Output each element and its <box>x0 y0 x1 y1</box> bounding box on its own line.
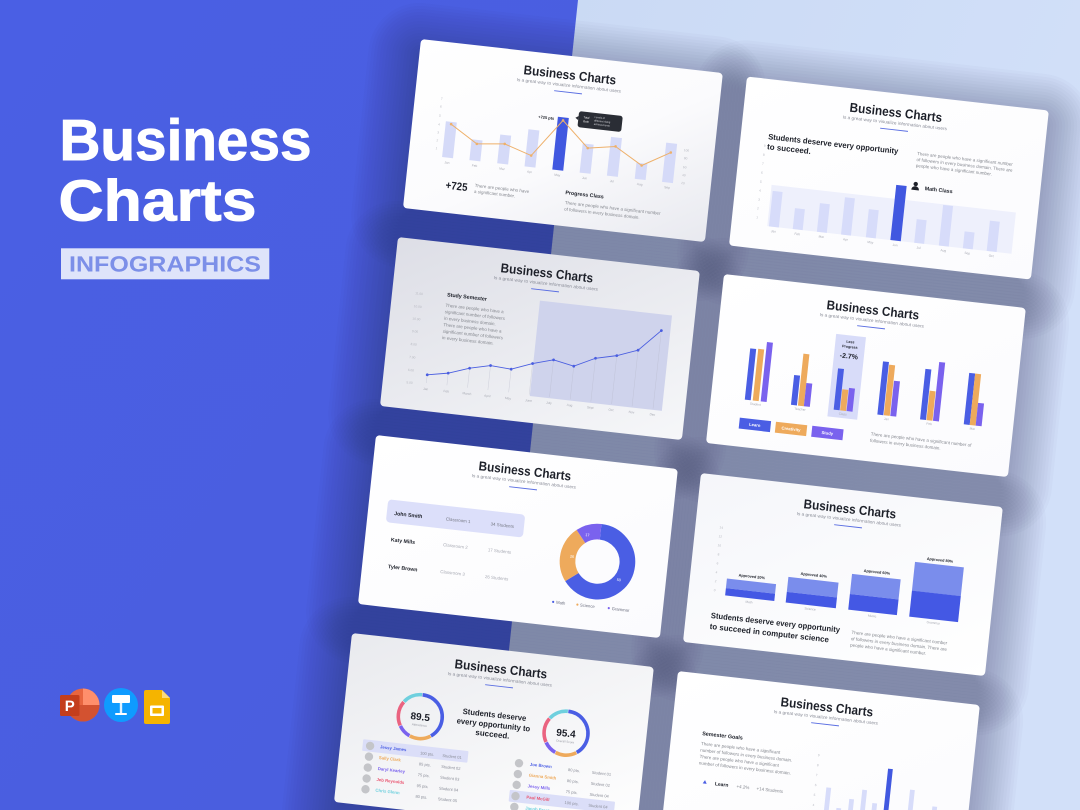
y axis labels: 8 <box>763 153 765 157</box>
table rows: John Smith <box>394 511 423 520</box>
side heading and text: There are people who have a <box>445 303 504 314</box>
panel: semester goals slide <box>660 671 980 810</box>
progress class text: of followers in every business domain. <box>564 207 640 220</box>
table: left: Daryl Kearley <box>377 766 406 774</box>
bar chart <box>769 171 1002 252</box>
y axis labels: 1 <box>756 215 758 220</box>
table: right: 75 pts. <box>565 789 578 795</box>
axis labels: 6 <box>440 105 442 109</box>
panel: score rings slide <box>334 633 654 810</box>
month labels: Sep <box>964 251 971 256</box>
highlight column: Progress <box>842 344 858 350</box>
panel: donut chart slide <box>358 435 678 638</box>
side heading and text: in every business domain. <box>442 335 494 346</box>
y axis labels: 9.00 <box>412 329 419 334</box>
slide heading: Business Charts <box>500 260 594 286</box>
table: left: Student 05 <box>438 796 458 803</box>
badge: infographics: INFOGRAPHICS <box>69 252 261 277</box>
y axis labels: 6 <box>716 561 719 565</box>
y axis labels <box>756 144 766 220</box>
slide heading: Is a great way to visualize information about users <box>819 312 925 329</box>
slide heading: Business Charts <box>780 694 874 720</box>
table: left: Jessy James <box>380 744 407 752</box>
axis labels: 40 <box>682 173 686 177</box>
icon: person <box>911 181 920 190</box>
slide heading: Is a great way to visualize information about users <box>842 114 948 131</box>
month labels: Feb <box>443 389 449 394</box>
table: left: Student 01 <box>442 753 463 760</box>
bar value labels: Approved 20% <box>738 573 766 580</box>
y axis labels: 6.00 <box>408 368 414 373</box>
bar axis labels: Science <box>804 606 816 612</box>
side heading and text: significant number of followers <box>442 329 504 340</box>
icon: PowerPoint: P <box>65 698 75 715</box>
panel: highlighted bar chart slide <box>729 76 1049 280</box>
axis labels: 3 <box>437 130 439 135</box>
table: left: 75 pts. <box>418 772 430 778</box>
month labels: Jan <box>771 229 776 234</box>
description <box>850 630 948 658</box>
table: left: 100 pts. <box>420 750 435 757</box>
slide heading <box>773 694 881 730</box>
month labels: May <box>554 173 561 177</box>
headline: Students deserve every opportunity <box>710 611 841 635</box>
y axis labels: 7.00 <box>409 355 416 360</box>
month labels: Jun <box>582 176 588 180</box>
month labels: Apr <box>527 170 533 174</box>
progress class text: Progress Class <box>565 190 604 200</box>
highlight column: Less <box>846 340 855 345</box>
slide heading: Business Charts <box>803 496 897 522</box>
month labels: Oct <box>608 408 614 412</box>
legend buttons: Learn <box>749 422 761 428</box>
highlight column <box>827 334 866 420</box>
month labels: May <box>505 396 512 401</box>
slide heading: Is a great way to visualize information about users <box>493 275 599 292</box>
tooltip <box>574 111 623 132</box>
table rows: 17 Students <box>488 547 512 555</box>
month labels: March <box>462 391 472 396</box>
table: right: Student 04 <box>589 792 610 799</box>
y axis labels: 10.00 <box>414 304 422 309</box>
y axis labels: 7 <box>816 773 818 777</box>
icon: Google Slides <box>144 690 170 724</box>
line chart <box>425 303 663 409</box>
center headline: succeed. <box>475 728 510 741</box>
bar value labels <box>738 536 954 601</box>
goals description <box>699 741 793 776</box>
goals description: number of followers in every business domain. <box>699 760 791 776</box>
grouped bars: creativity <box>753 349 981 426</box>
slide heading: Business Charts <box>826 297 920 323</box>
month labels: Jan <box>444 160 450 165</box>
bar chart <box>442 104 679 183</box>
slide heading: Is a great way to visualize information about users <box>773 709 879 726</box>
tooltip: Total <box>583 115 590 120</box>
panel: line chart slide <box>380 237 700 440</box>
month labels: Aug <box>567 403 573 408</box>
y axis labels: 4 <box>715 570 718 574</box>
table: right: Student 04 <box>588 803 609 810</box>
donut legend: Grammar <box>611 606 630 613</box>
center headline <box>455 706 532 743</box>
month labels: Feb <box>472 163 478 168</box>
table: right: 80 pts. <box>568 767 580 773</box>
slide heading: Is a great way to visualize information about users <box>516 77 622 94</box>
slide heading: Is a great way to visualize information about users <box>796 511 902 528</box>
table: right <box>508 758 618 810</box>
slide heading: Is a great way to visualize information about users <box>471 473 577 490</box>
table: right: Joe Brown <box>530 762 552 769</box>
bar axis labels: Grammar <box>926 620 941 626</box>
bar value labels: Approved 60% <box>864 569 891 576</box>
bar axis labels: Music <box>868 614 877 619</box>
y axis labels: 4 <box>812 803 815 807</box>
tooltip: achievements <box>594 123 611 128</box>
table: right: Gianna Smith <box>529 773 557 781</box>
y axis labels: 9 <box>818 753 820 757</box>
stat: +725: +725 <box>445 180 468 194</box>
slide heading <box>471 458 579 494</box>
bar axis labels <box>745 600 941 626</box>
description: people who have a significant number. <box>916 163 992 177</box>
slide heading: Business Charts <box>478 458 572 484</box>
bar value labels: Approved 80% <box>927 557 954 564</box>
month labels: April <box>484 394 491 398</box>
donut values: 26 <box>570 554 574 559</box>
slide heading <box>447 656 555 692</box>
donut chart <box>564 528 630 595</box>
month labels: Jul <box>916 246 921 250</box>
bar axis labels: Math <box>745 600 753 605</box>
y axis labels: 2 <box>714 579 717 583</box>
tooltip: Gain <box>583 119 590 124</box>
y axis labels: 11.00 <box>415 291 423 296</box>
month labels: Mar <box>818 234 825 239</box>
table: right: Paul McGill <box>526 795 550 802</box>
callout value: +725 pts <box>538 114 555 121</box>
table: left: Sally Clark <box>379 755 402 763</box>
headline <box>767 132 899 166</box>
month labels: Mar <box>499 167 506 171</box>
table: left: Jeb Reynolds <box>376 777 405 785</box>
month labels: Jun <box>892 243 898 247</box>
month labels: Sept <box>587 405 594 410</box>
y axis labels <box>405 291 423 385</box>
icon: Keynote <box>104 688 138 722</box>
group labels: Feb <box>926 422 932 426</box>
month labels: Nov <box>628 410 635 415</box>
month labels: Apr <box>843 237 849 242</box>
main title: Business <box>60 108 312 173</box>
highlight column: -2.7% <box>839 352 859 362</box>
side heading and text: Study Semester <box>447 292 487 303</box>
goals description: There are people who have a significant <box>699 754 780 768</box>
stacked bars <box>725 541 964 622</box>
donut values <box>568 532 625 582</box>
chart background band <box>767 185 1016 254</box>
ring chart 95.4 <box>542 709 590 758</box>
slide heading <box>819 297 927 333</box>
month labels: May <box>867 240 874 245</box>
table rows: Classroom 1 <box>446 516 471 524</box>
table rows: Classroom 2 <box>443 542 468 550</box>
grouped bars: study <box>761 342 988 426</box>
slide heading <box>796 496 904 532</box>
description: followers in every business domain. <box>870 438 941 451</box>
y axis labels: 2 <box>757 206 759 211</box>
month labels: Jan <box>423 387 429 391</box>
slide heading: Business Charts <box>523 62 617 88</box>
axis labels: 80 <box>684 156 688 161</box>
stat description: There are people who have <box>474 183 530 194</box>
line chart <box>447 107 674 173</box>
legend row: learn: +4.2% <box>736 784 750 790</box>
month labels <box>771 229 994 258</box>
progress class text: There are people who have a significant number <box>565 200 661 216</box>
legend buttons <box>739 418 844 440</box>
legend row: learn: +14 Students <box>756 786 784 794</box>
card shadows <box>277 0 1080 810</box>
axis labels: 2 <box>436 138 439 143</box>
group labels: Student <box>750 402 761 407</box>
axis labels: 1 <box>435 146 438 150</box>
table highlight row <box>386 499 525 538</box>
y axis labels: 9 <box>764 144 766 148</box>
tooltip: Levels of <box>594 116 605 120</box>
description <box>916 151 1014 179</box>
slide heading: Business Charts <box>849 100 943 125</box>
y axis labels: 8 <box>817 763 819 767</box>
table: left: Student 04 <box>439 785 459 793</box>
table: right: Jessy Mills <box>527 783 551 791</box>
goals description: There are people who have a significant <box>701 741 781 755</box>
goals heading: Semester Goals <box>702 731 743 742</box>
month labels: Dec <box>649 412 656 417</box>
table rows: 26 Students <box>485 574 509 582</box>
bar chart <box>820 762 941 810</box>
axis labels: 20 <box>681 181 685 185</box>
axis labels: 4 <box>438 122 440 127</box>
donut legend <box>552 599 630 613</box>
y axis labels: 3 <box>758 197 760 202</box>
group labels: Class <box>839 412 847 417</box>
panel: grouped bar chart slide <box>706 274 1026 477</box>
y axis labels: 8.00 <box>410 342 417 347</box>
y axis labels: 6 <box>761 171 763 175</box>
table: right: 80 pts. <box>567 778 579 784</box>
axis labels: 5 <box>439 113 441 118</box>
shaded chart region <box>530 301 672 411</box>
month labels: Jul <box>610 179 614 183</box>
stat description <box>474 183 530 200</box>
table: left: 95 pts. <box>416 783 429 789</box>
group labels <box>750 402 976 431</box>
axis labels: 7 <box>441 97 443 101</box>
side heading and text: significant number of followers <box>445 309 506 321</box>
y axis labels: 0 <box>714 588 716 592</box>
slide heading: Business Charts <box>454 656 548 682</box>
table: right: 100 pts. <box>564 800 579 806</box>
ring chart 95.4: Overall Score <box>556 739 575 745</box>
legend row: learn <box>702 780 784 795</box>
y axis labels: 10.00 <box>412 317 421 322</box>
slide heading <box>516 62 624 98</box>
group labels: Mar <box>969 426 976 431</box>
description: of followers in every business domain. There are <box>851 636 948 652</box>
axis labels <box>435 97 692 186</box>
table: left: 80 pts. <box>415 794 428 800</box>
table: left <box>358 739 469 804</box>
table: right: Student 01 <box>592 770 612 777</box>
y axis labels: 5 <box>760 180 762 184</box>
goals description: number of followers in every business domain. <box>700 747 792 763</box>
table: left: Student 03 <box>440 775 460 782</box>
y axis labels <box>713 525 724 592</box>
panel: approved stacked bars slide <box>683 473 1003 676</box>
headline: to succeed. <box>767 142 811 156</box>
table: left: Chris Glenn <box>375 788 400 795</box>
donut legend: Science <box>580 602 596 609</box>
ring chart 89.5 <box>396 692 444 741</box>
description: people who have a significant number. <box>850 642 926 656</box>
panel: combo bar and line chart slide <box>403 39 723 242</box>
month labels: Oct <box>988 254 994 258</box>
ring chart 95.4: 95.4 <box>556 728 577 741</box>
ring chart 89.5: Attendance <box>412 722 427 728</box>
grouped bars: learn <box>745 346 975 425</box>
y axis labels: 5.00 <box>406 380 413 385</box>
center headline: every opportunity to <box>456 716 531 734</box>
table: right: Student 02 <box>590 781 611 788</box>
headline: Students deserve every opportunity <box>768 132 899 156</box>
side heading and text: There are people who have a <box>443 322 502 334</box>
month labels: June <box>525 398 532 403</box>
month labels: Feb <box>794 232 800 236</box>
y axis labels: 14 <box>719 525 724 530</box>
table rows: Classroom 3 <box>440 569 466 577</box>
tooltip: different rising <box>594 119 611 124</box>
axis labels: 100 <box>684 148 690 153</box>
y axis labels: 7 <box>762 162 764 166</box>
legend buttons: Study <box>821 430 834 436</box>
description: of followers in every business domain. There are <box>916 157 1013 173</box>
y axis labels: 4 <box>759 189 761 193</box>
table rows: 34 Students <box>490 521 515 529</box>
y axis labels: 6 <box>814 783 817 787</box>
table: left: 85 pts. <box>419 761 431 768</box>
center headline: Students deserve <box>462 707 527 723</box>
month labels <box>423 387 656 417</box>
slide heading <box>842 99 950 136</box>
donut values: 17 <box>585 533 590 538</box>
description: There are people who have a significant number <box>851 630 948 646</box>
headline <box>709 611 841 645</box>
slide heading: Is a great way to visualize information about users <box>447 671 553 688</box>
progress class text <box>563 190 662 222</box>
ring chart 89.5: 89.5 <box>410 711 431 724</box>
y axis labels: 5 <box>813 793 816 797</box>
y axis labels: 10 <box>717 543 722 548</box>
month labels <box>444 160 670 190</box>
donut values: 50 <box>616 578 621 582</box>
donut legend: Math <box>556 600 566 606</box>
description: There are people who have a significant number <box>917 151 1014 167</box>
headline: to succeed in computer science <box>709 622 830 644</box>
table rows: Katy Mills <box>391 537 415 546</box>
background: blue diagonal left panel <box>0 0 578 810</box>
month labels: Aug <box>637 182 643 187</box>
bar value labels: Approved 40% <box>800 572 828 579</box>
legend row: learn: Learn <box>715 781 729 789</box>
main title <box>58 108 312 234</box>
group labels: Teacher <box>794 407 807 412</box>
y axis labels <box>812 753 820 807</box>
table: left: Student 02 <box>441 764 462 771</box>
y axis labels: 12 <box>718 534 723 539</box>
slide heading <box>493 260 601 296</box>
table rows: Tyler Brown <box>388 564 418 573</box>
label: math class: Math Class <box>924 186 953 195</box>
icon: PowerPoint <box>60 688 100 722</box>
month labels: July <box>546 401 552 405</box>
month labels: Aug <box>940 248 947 253</box>
group labels: Jan <box>884 417 889 421</box>
month labels: Sep <box>664 185 670 190</box>
description: There are people who have a significant number of <box>870 431 972 448</box>
side heading and text: in every business domain. <box>444 316 496 326</box>
legend buttons: Creativity <box>781 425 801 433</box>
table rows <box>388 510 515 584</box>
badge: infographics <box>61 248 269 279</box>
main title: Charts <box>58 168 256 234</box>
y axis labels: 8 <box>717 552 720 557</box>
axis labels: 60 <box>683 165 687 170</box>
stat description: a significant number. <box>474 189 515 198</box>
side heading and text <box>442 292 508 347</box>
